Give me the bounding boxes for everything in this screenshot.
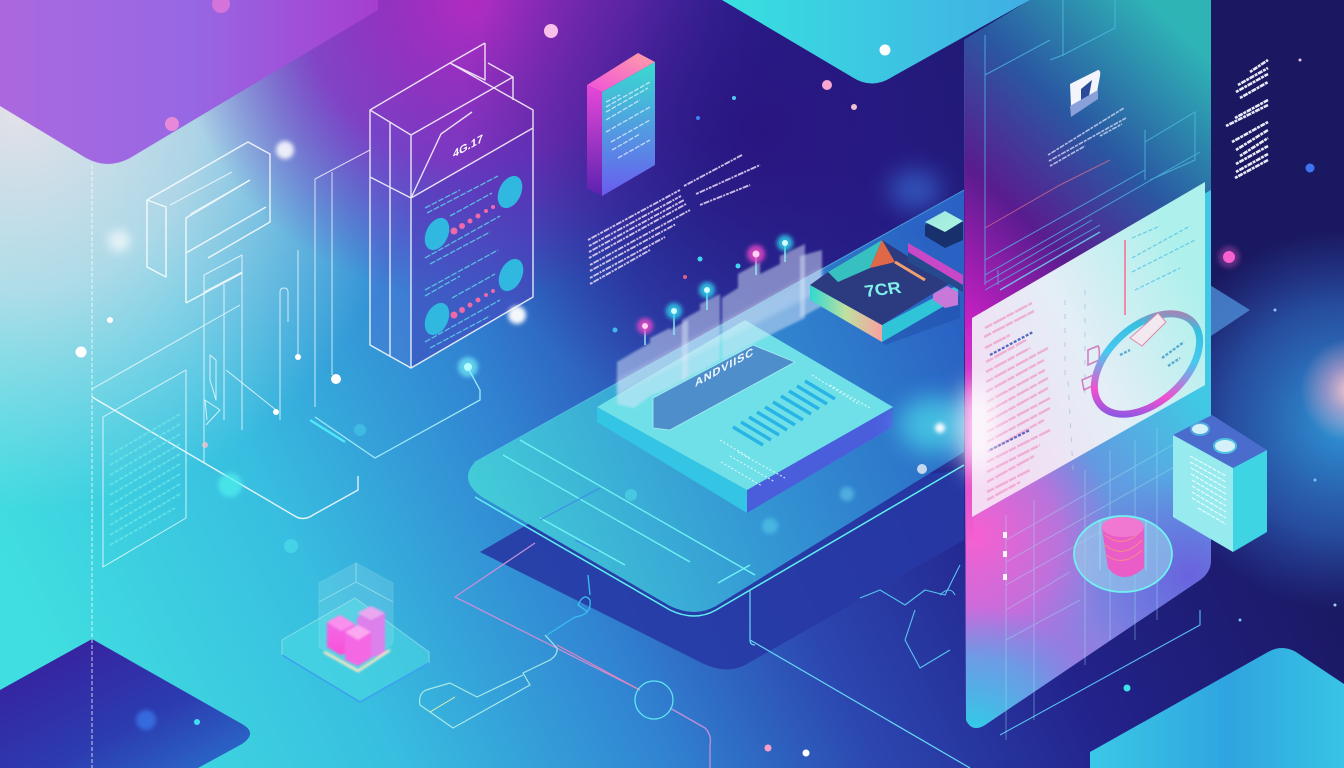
right side text block (1226, 60, 1268, 178)
cube dials (1191, 423, 1236, 453)
panel text (1048, 108, 1126, 166)
hexagon: bottom right teal (1090, 648, 1344, 768)
sliver of platform behind right panel (1205, 282, 1250, 340)
panel grid lines (985, 0, 1200, 290)
platform: central slab (468, 190, 964, 616)
title card on slab (653, 345, 795, 430)
cube text (1190, 456, 1226, 524)
hexagon: top left purple (0, 0, 378, 164)
progress ring (1075, 294, 1219, 434)
wireframe: tall data box (370, 43, 533, 368)
wireframe: left machine (92, 142, 480, 768)
white flare at panel edge (960, 382, 996, 474)
pie charts on box (420, 172, 528, 339)
text lines on box (425, 176, 500, 348)
small isometric book (587, 53, 655, 196)
small pink cube chart bottom left (282, 563, 429, 702)
screen pink text lines (984, 303, 1050, 500)
hexagon: top centre teal (722, 0, 1030, 84)
cylinder on disc (1074, 516, 1172, 592)
icon label on box: 4G.17 (453, 131, 483, 161)
screen small icons (1082, 346, 1099, 390)
logo mark (1070, 70, 1100, 117)
energy glow near panel (840, 170, 971, 501)
document text on left wire panel (110, 414, 180, 545)
screen (972, 182, 1205, 517)
shadow under platform (480, 470, 964, 669)
lower grid lines (1006, 428, 1190, 740)
small chip and strips (908, 211, 963, 292)
pink cubes (324, 606, 390, 671)
circuit chip card (810, 240, 960, 345)
hexagon: bottom left dark (0, 639, 250, 768)
circuit lines bottom centre (420, 543, 1200, 768)
right tall panel (964, 0, 1219, 740)
glass bars row (617, 244, 822, 408)
pink dots on box (450, 205, 495, 318)
chip label: 7CR (863, 278, 903, 301)
title text on card: ANDVIISC (695, 344, 754, 390)
screen right column (1124, 240, 1126, 315)
iso cube right (1173, 415, 1267, 552)
bar stripes (733, 381, 835, 445)
glowing lamps (637, 235, 793, 345)
text block beside book (588, 155, 760, 284)
chart slab in centre (597, 235, 893, 513)
